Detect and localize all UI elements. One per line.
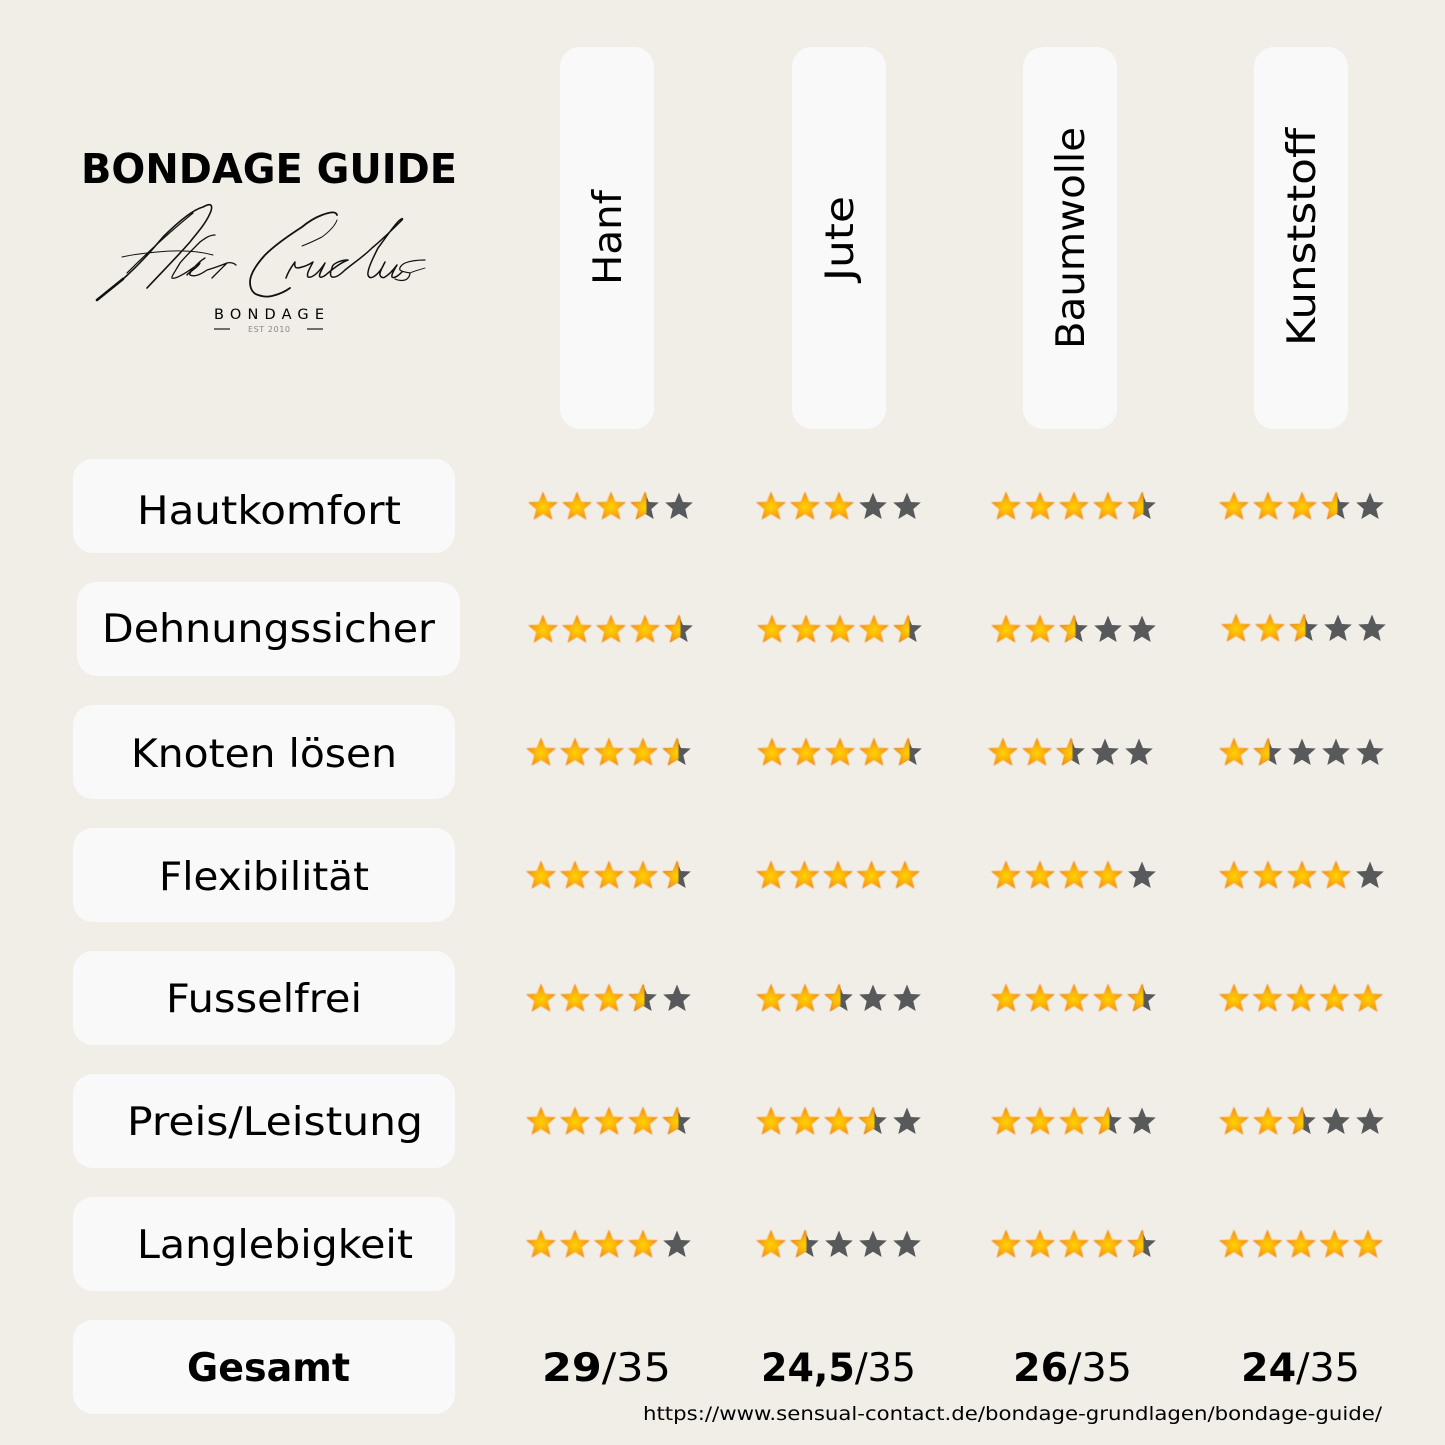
row label: Fusselfrei <box>73 951 455 1045</box>
column header: Kunststoff: Kunststoff <box>1280 127 1325 346</box>
rating: Dehnungssicher Jute 4.5 <box>757 614 922 643</box>
rating: Dehnungssicher Baumwolle 2.5 <box>991 614 1156 643</box>
row label: Hautkomfort: Hautkomfort <box>137 489 401 534</box>
rating: Fusselfrei Baumwolle 4.5 <box>991 984 1156 1012</box>
row label: Knoten lösen <box>73 705 455 799</box>
row label: Preis/Leistung <box>73 1074 455 1168</box>
rating: Knoten lösen Kunststoff 1.5 <box>1219 738 1384 766</box>
source url: https://www.sensual-contact.de/bondage-grundlagen/bondage-guide/ <box>643 1403 1383 1425</box>
row label: Gesamt: Gesamt <box>187 1346 350 1391</box>
total: Hanf: 29/35 <box>542 1346 671 1391</box>
row label: Knoten lösen: Knoten lösen <box>131 732 397 777</box>
rating: Hautkomfort Baumwolle 4.5 <box>991 492 1156 520</box>
column header: Kunststoff <box>1254 47 1348 429</box>
rating: Preis/Leistung Baumwolle 3.5 <box>991 1106 1156 1135</box>
total: Kunststoff: 24/35 <box>1241 1346 1360 1391</box>
row label: Langlebigkeit <box>73 1197 455 1291</box>
rating: Preis/Leistung Jute 3.5 <box>756 1106 921 1135</box>
row label: Flexibilität <box>73 828 455 922</box>
rating: Preis/Leistung Hanf 4.5 <box>526 1106 691 1135</box>
rating: Flexibilität Kunststoff 4 <box>1219 860 1384 889</box>
logo: est 2010: EST 2010 <box>248 325 290 334</box>
row label: Dehnungssicher <box>77 582 460 676</box>
rating: Hautkomfort Kunststoff 3.5 <box>1219 492 1384 520</box>
rating: Hautkomfort Hanf 3.5 <box>528 492 693 520</box>
row label: Fusselfrei: Fusselfrei <box>166 977 362 1022</box>
title: BONDAGE GUIDE <box>81 145 457 193</box>
rating: Knoten lösen Jute 4.5 <box>757 738 922 766</box>
column header: Jute <box>792 47 886 429</box>
rating: Flexibilität Jute 5 <box>756 860 920 889</box>
rating: Knoten lösen Hanf 4.5 <box>526 738 691 766</box>
rating: Langlebigkeit Kunststoff 5 <box>1219 1230 1383 1258</box>
rating: Langlebigkeit Baumwolle 4.5 <box>991 1230 1156 1258</box>
rating: Fusselfrei Kunststoff 5 <box>1219 984 1383 1012</box>
row label: Gesamt <box>73 1320 455 1414</box>
logo: Ater Crudus signature <box>97 205 425 300</box>
rating: Dehnungssicher Kunststoff 2.5 <box>1221 614 1386 642</box>
column header: Hanf: Hanf <box>586 189 631 285</box>
rating: Knoten lösen Baumwolle 2.5 <box>988 738 1153 766</box>
row label: Hautkomfort <box>73 459 455 553</box>
column header: Baumwolle: Baumwolle <box>1049 127 1094 349</box>
rating: Flexibilität Baumwolle 4 <box>991 860 1156 889</box>
row label: Preis/Leistung: Preis/Leistung <box>127 1100 423 1145</box>
column header: Jute: Jute <box>818 196 863 284</box>
logo: bondage wordmark: BONDAGE <box>214 307 324 323</box>
column header: Baumwolle <box>1023 47 1117 429</box>
rating: Fusselfrei Jute 2.5 <box>756 984 921 1012</box>
rating: Langlebigkeit Hanf 4 <box>526 1230 691 1258</box>
column header: Hanf <box>560 47 654 429</box>
title block <box>81 145 457 334</box>
rating: Dehnungssicher Hanf 4.5 <box>528 614 693 643</box>
total: Jute: 24,5/35 <box>761 1346 916 1391</box>
row label: Flexibilität: Flexibilität <box>159 855 369 900</box>
row label: Langlebigkeit: Langlebigkeit <box>137 1223 413 1268</box>
row label: Dehnungssicher: Dehnungssicher <box>102 607 436 652</box>
rating: Flexibilität Hanf 4.5 <box>526 860 691 889</box>
rating: Preis/Leistung Kunststoff 2.5 <box>1219 1106 1384 1135</box>
logo: side dashes <box>214 328 323 330</box>
rating: Langlebigkeit Jute 1.5 <box>756 1230 921 1258</box>
total: Baumwolle: 26/35 <box>1013 1346 1132 1391</box>
rating: Fusselfrei Hanf 3.5 <box>526 984 691 1012</box>
rating: Hautkomfort Jute 3 <box>756 492 921 520</box>
